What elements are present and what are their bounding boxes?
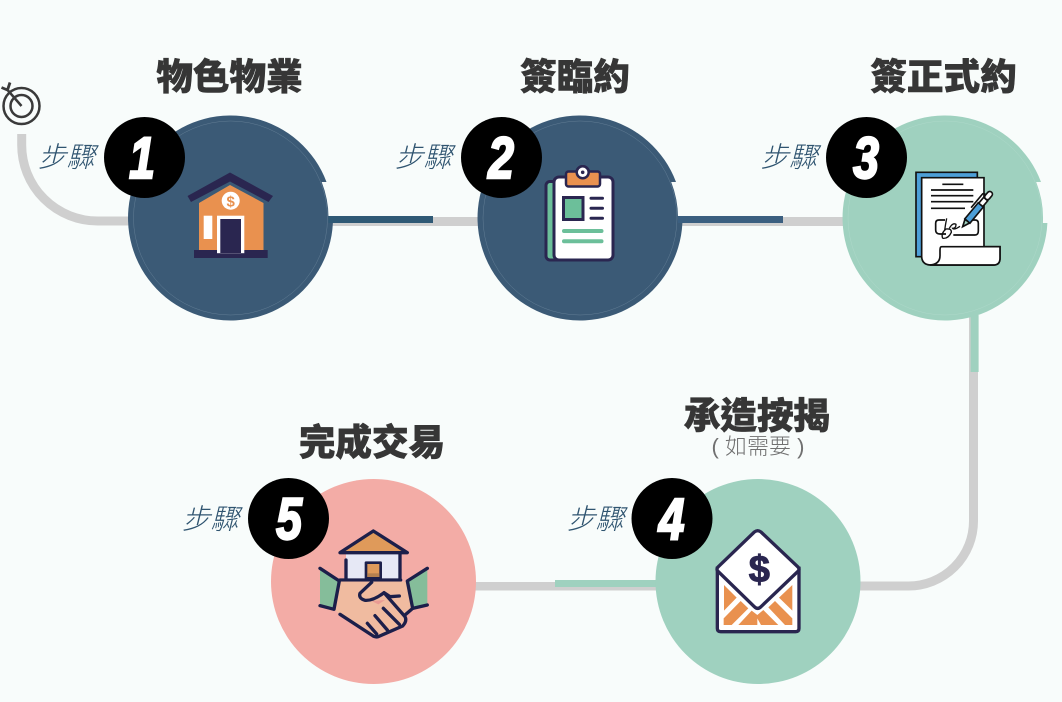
heading: step 5: 完成交易 [299, 422, 445, 463]
badge: number 5: 5 [276, 487, 303, 552]
step 3 label: 步驟 [760, 142, 822, 174]
circle: step 3 background [843, 115, 1047, 320]
circle: step 2 background [478, 115, 682, 320]
badge: number 5 [248, 478, 329, 559]
heading: step 3: 簽正式約 [870, 56, 1017, 98]
icon: bank house [188, 172, 273, 258]
step 4 label: 步驟 [567, 504, 628, 536]
arrow: connector step 3 to step 4 [855, 315, 979, 586]
circle: step 1 background [128, 115, 333, 320]
step 2 label: 步驟 [395, 142, 456, 174]
subheading: if needed: ( 如需要 ) [712, 434, 804, 459]
icon: clipboard [546, 165, 613, 260]
badge: number 3: 3 [853, 126, 879, 191]
icon: bank house: $ [227, 194, 236, 210]
arrow: connector step 2 to step 3 [675, 216, 850, 226]
arrow: connector step 1 to step 2 [325, 216, 485, 226]
badge: number 4 [632, 478, 712, 559]
heading: step 4: 承造按揭 [684, 396, 830, 436]
badge: number 1: 1 [129, 126, 155, 191]
icon: target start marker [2, 82, 40, 124]
panel: step 1 [38, 56, 333, 320]
icon: money envelope: $ [749, 549, 770, 591]
icon: handshake with house [320, 531, 427, 637]
heading: step 2: 簽臨約 [520, 56, 630, 98]
badge: number 2 [461, 117, 542, 198]
step 1 label: 步驟 [38, 142, 99, 174]
heading: step 1: 物色物業 [156, 56, 303, 98]
panel: step 3 [760, 56, 1047, 320]
icon: signed contract [916, 172, 1000, 265]
panel: step 5 [182, 422, 476, 684]
arrow: connector path from start to step 1 [22, 134, 135, 221]
badge: number 3 [826, 117, 907, 198]
panel: step 2 [395, 56, 682, 320]
panel: step 4 [567, 396, 860, 684]
circle: step 5 background [271, 479, 476, 684]
icon: money envelope [717, 531, 799, 632]
badge: number 2: 2 [487, 126, 514, 191]
badge: number 4: 4 [658, 487, 684, 552]
circle: step 4 background [656, 479, 860, 684]
step 5 label: 步驟 [182, 504, 243, 536]
badge: number 1 [104, 117, 185, 198]
arrow: connector step 4 to step 5 [470, 580, 665, 590]
